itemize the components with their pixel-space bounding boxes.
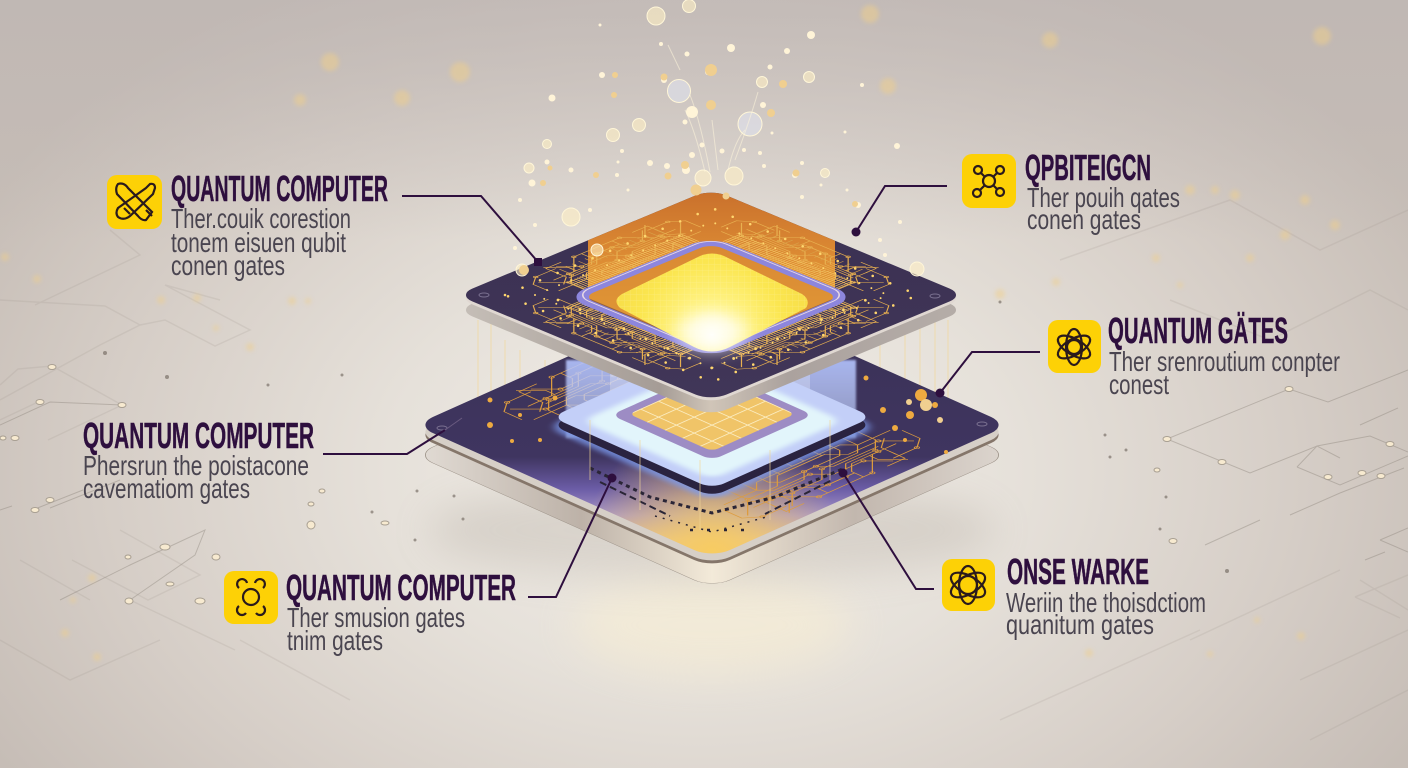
description: Ther smusion gates	[287, 602, 465, 633]
heading: QUANTUM COMPUTER	[83, 415, 314, 456]
glowing quantum core	[616, 254, 808, 352]
heading: QUANTUM COMPUTER	[171, 168, 388, 209]
label: quantum computer, bottom	[224, 567, 516, 656]
upper plate side	[457, 192, 965, 416]
icon: crossed tools	[107, 175, 162, 229]
label: qpbiteigcn, top right	[962, 147, 1180, 235]
upper ring	[574, 238, 848, 354]
circuit sparkle dots	[505, 208, 918, 382]
upper plate surface	[457, 185, 965, 401]
description	[287, 602, 465, 656]
lower plate side	[415, 299, 1009, 588]
description: cavematiom gates	[83, 473, 250, 504]
background circuit traces	[0, 200, 1408, 740]
label: quantum computer, left	[83, 415, 314, 504]
description	[171, 203, 351, 281]
leader line: top right	[852, 186, 947, 236]
description: conest	[1109, 369, 1169, 400]
description: conen gates	[171, 250, 285, 281]
description: Ther.couik corestion	[171, 203, 351, 234]
lower plate surface	[425, 356, 999, 554]
particle streams	[668, 45, 758, 172]
leader line: left	[323, 418, 462, 454]
lower ring frame	[546, 345, 878, 501]
rising qubit particles	[513, 0, 943, 423]
front light lines	[590, 420, 830, 530]
upper plate corner marks	[437, 293, 987, 430]
description	[1109, 346, 1340, 400]
lower chip components	[590, 468, 845, 532]
upper circuit traces	[477, 197, 945, 393]
leader line: bottom right	[838, 468, 934, 589]
chip: upper layer	[437, 185, 987, 430]
small particles	[513, 24, 902, 257]
leader line: bottom	[528, 474, 616, 597]
vertical light lines behind chip	[478, 320, 948, 500]
leader line: right	[936, 352, 1040, 398]
description	[83, 450, 309, 504]
icon: linked nodes	[962, 154, 1016, 208]
label: quantum gates, right	[1048, 310, 1340, 400]
leader line: top left	[402, 196, 542, 266]
icon: orbit nodes	[224, 571, 278, 624]
warm particles	[519, 64, 943, 423]
bubbles	[516, 0, 924, 276]
icon: atom	[1048, 320, 1101, 373]
heading: ONSE WARKE	[1007, 551, 1149, 592]
heading: QUANTUM COMPUTER	[286, 567, 516, 608]
icon: atom orbit	[942, 559, 995, 611]
chip: lower layer	[425, 356, 999, 584]
description	[1027, 182, 1180, 235]
label: onse warke, bottom right	[942, 551, 1206, 640]
lower glowing core	[581, 362, 843, 480]
description: quanitum gates	[1006, 609, 1154, 640]
description: tonem eisuen qubit	[171, 227, 346, 258]
description: Weriin the thoisdctiom	[1006, 587, 1206, 618]
description	[1006, 587, 1206, 640]
heading: QPBITEIGCN	[1025, 147, 1151, 188]
description: Ther pouih qates	[1027, 182, 1180, 213]
lower light columns	[566, 360, 856, 442]
description: Phersrun the poistacone	[83, 450, 309, 481]
description: conen gates	[1027, 204, 1141, 235]
label: quantum computer, top left	[107, 168, 388, 281]
description: tnim gates	[287, 625, 383, 656]
